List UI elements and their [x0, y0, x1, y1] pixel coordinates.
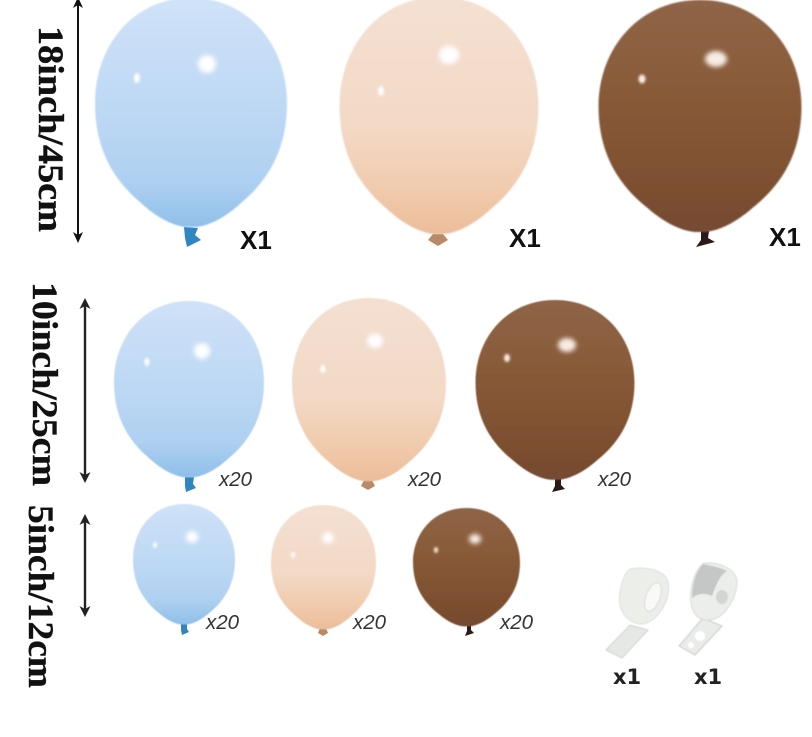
quantity: 10 inch peach: x20 [407, 468, 442, 491]
quantity: 18 inch peach: X1 [509, 223, 541, 253]
balloon: peach 10 inch [292, 298, 446, 490]
balloon: blue 10 inch [114, 301, 264, 492]
quantity: 10 inch blue: x20 [218, 468, 253, 491]
arrow: 18 inch height [73, 0, 83, 243]
quantity: 18 inch blue: X1 [240, 225, 272, 255]
arrow: 10 inch height [80, 298, 90, 483]
icon: glue dot roll [606, 568, 669, 658]
balloon: brown 10 inch [476, 300, 634, 492]
quantity: 18 inch brown: X1 [769, 222, 801, 252]
label: 5 inch size: 5inch/12cm [21, 505, 61, 688]
balloon: peach 18 inch [340, 0, 538, 246]
balloon: blue 18 inch [95, 0, 287, 247]
balloon: blue 5 inch [133, 504, 235, 635]
label: 10 inch size: 10inch/25cm [25, 282, 65, 486]
quantity: 10 inch brown: x20 [597, 468, 632, 491]
label: 18 inch size: 18inch/45cm [31, 26, 71, 232]
icon: balloon arch tape roll [679, 563, 737, 655]
balloon: brown 5 inch [413, 508, 520, 636]
quantity: 5 inch blue: x20 [205, 611, 240, 634]
quantity: arch tape: x1 [694, 665, 722, 689]
quantity: glue dots: x1 [613, 665, 641, 689]
quantity: 5 inch brown: x20 [499, 611, 534, 634]
balloon: peach 5 inch [271, 505, 376, 636]
balloon: brown 18 inch [599, 0, 801, 247]
arrow: 5 inch height [80, 514, 90, 617]
quantity: 5 inch peach: x20 [352, 611, 387, 634]
